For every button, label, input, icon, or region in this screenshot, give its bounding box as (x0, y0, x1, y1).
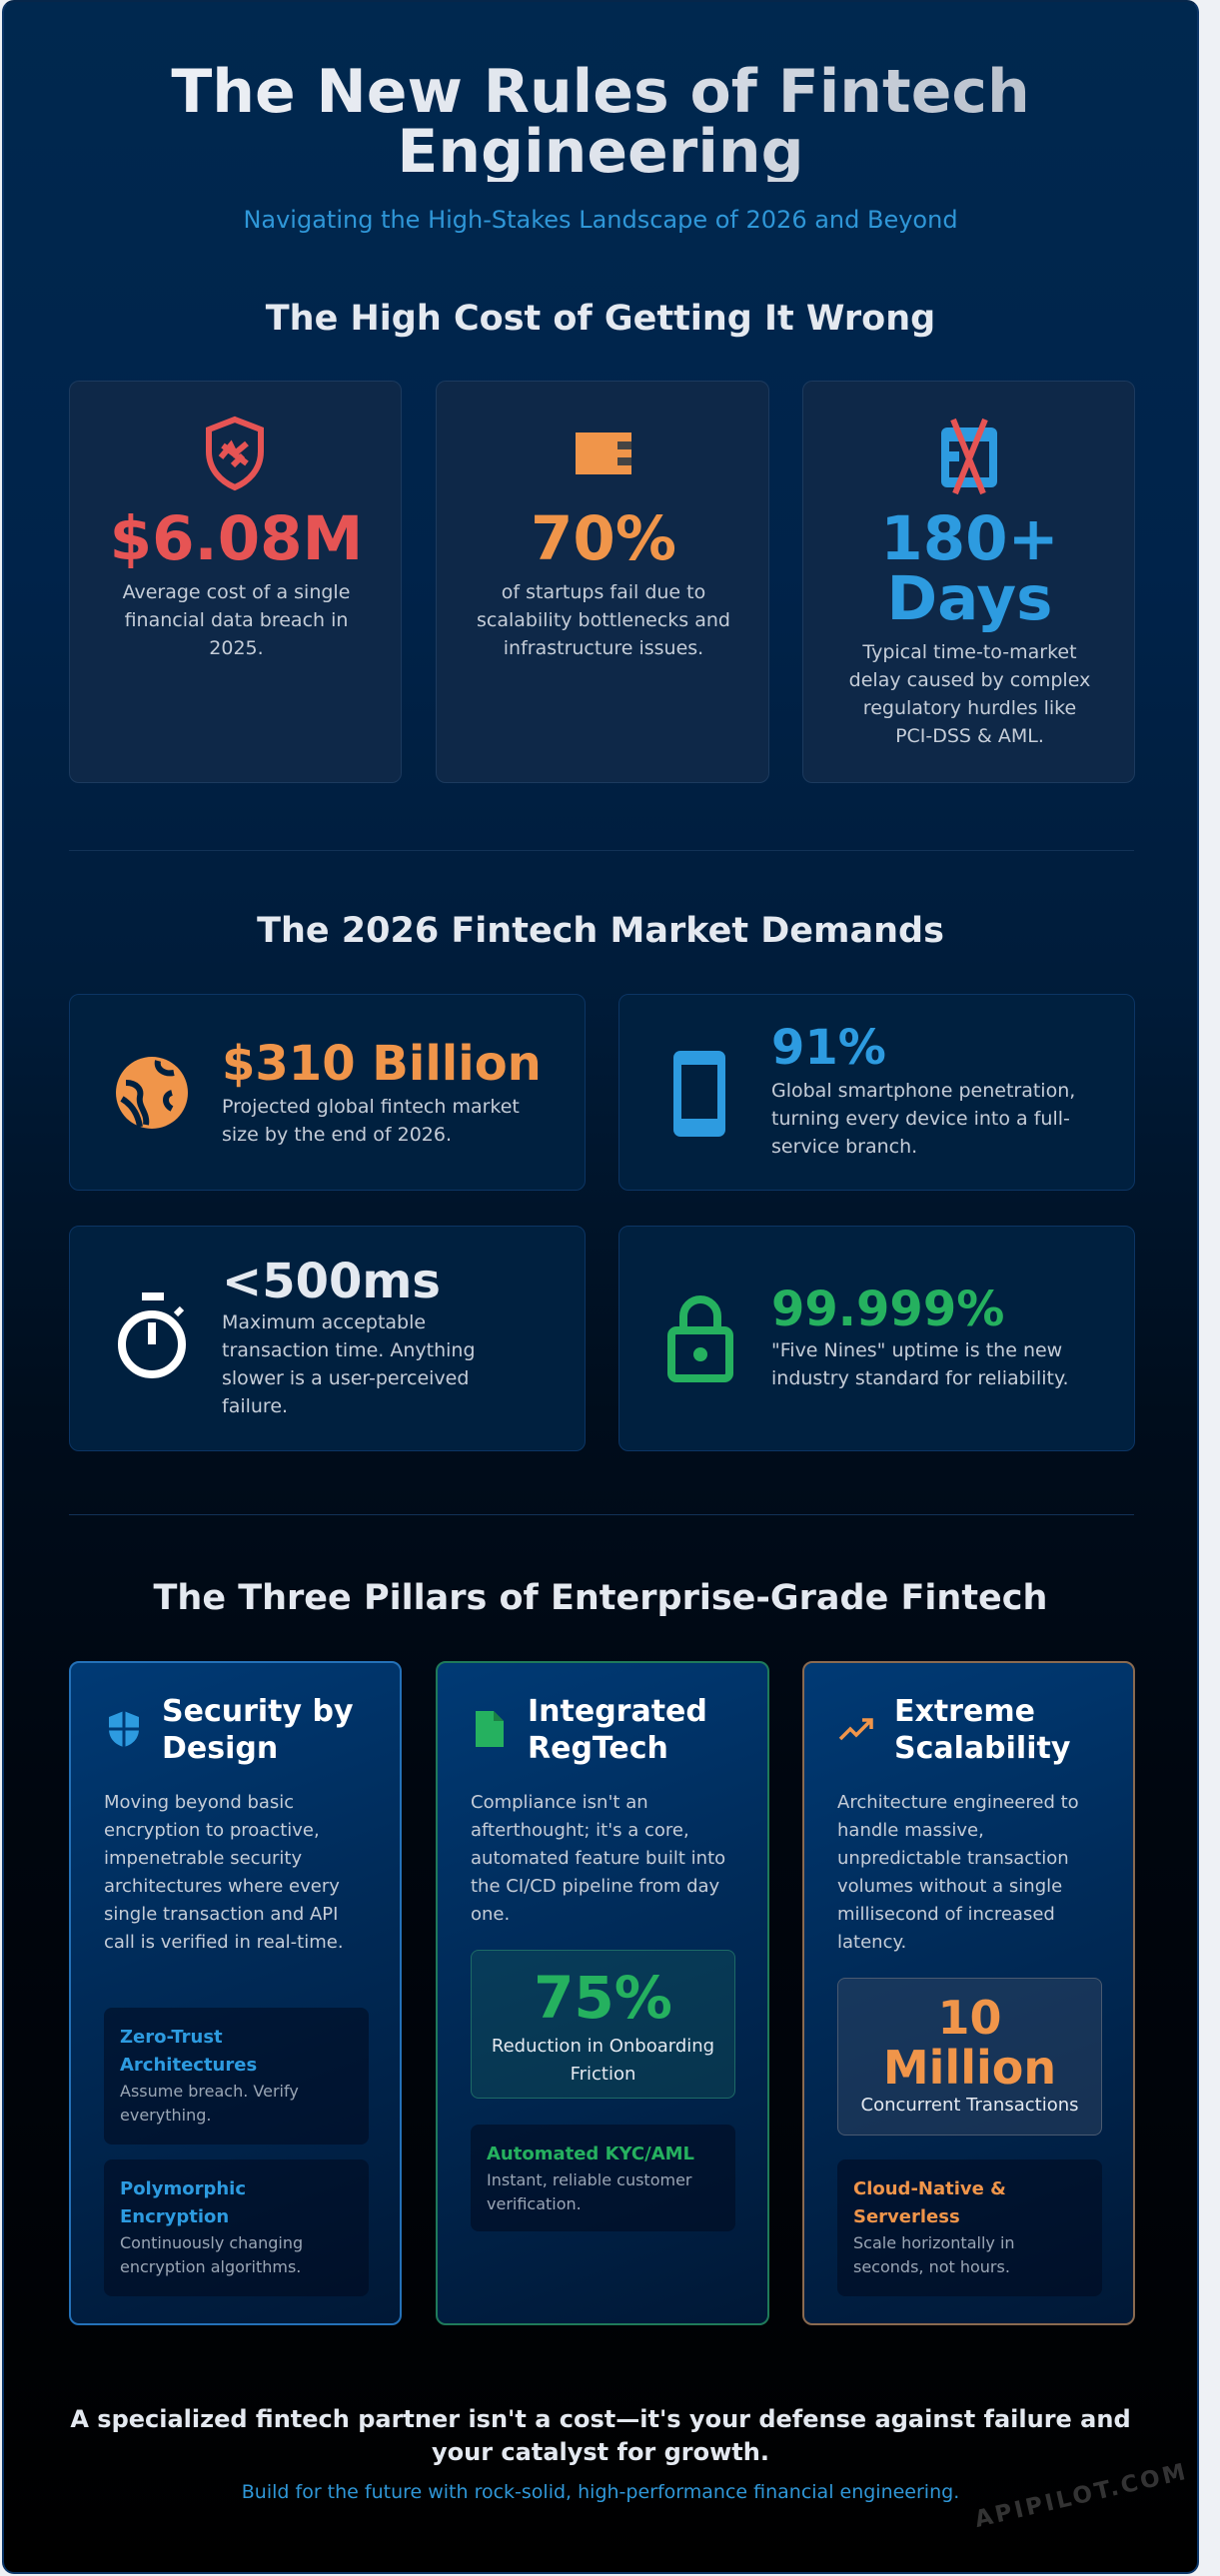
pillar title (528, 1694, 707, 1766)
card: uptime (618, 1226, 1135, 1451)
description: Typical time-to-market delay caused by complex regulatory hurdles like PCI-DSS & AML. (849, 641, 1090, 747)
sub: kyc: Automated KYC/AML (487, 2144, 694, 2164)
card: startup failure (436, 381, 769, 783)
stat box: 10 million: Million (883, 2041, 1056, 2095)
sub: cloud native (837, 2159, 1102, 2296)
sub: kyc (471, 2125, 735, 2231)
closing subline: Build for the future with rock-solid, high-performance financial engineering. (242, 2481, 959, 2503)
card: market size (69, 994, 586, 1191)
stat (880, 503, 1059, 634)
sub: polymorphic: Polymorphic Encryption (120, 2178, 246, 2227)
pillar: scalability (802, 1661, 1135, 2325)
pillar title: Scalability (894, 1731, 1070, 1766)
title: The New Rules of Fintech (171, 57, 1030, 127)
stat: Days (887, 563, 1053, 634)
closing statement: A specialized fintech partner isn't a cost—it's your defense against failure and your catalyst for growth. (70, 2405, 1131, 2466)
stat: 180+ (880, 503, 1059, 574)
description: Projected global fintech market size by the end of 2026. (222, 1096, 520, 1146)
sub: polymorphic: Continuously changing encryption algorithms. (120, 2233, 303, 2276)
sub: zero trust: Zero-Trust Architectures (120, 2027, 257, 2076)
pillar title (162, 1694, 354, 1766)
icon: shield (109, 1712, 139, 1747)
heading: market demands: The 2026 Fintech Market Demands (257, 911, 944, 951)
pillar: security (69, 1661, 402, 2325)
stat box: 10 million (837, 1978, 1102, 2136)
pillar title: Integrated (528, 1694, 707, 1729)
icon: document (476, 1711, 504, 1747)
pillar title: Design (162, 1731, 278, 1766)
pillar title: Extreme (894, 1694, 1035, 1729)
description: of startups fail due to scalability bottlenecks and infrastructure issues. (477, 581, 730, 659)
stat box: 10 million: 10 (937, 1991, 1001, 2045)
stat box: 75%: 75% (534, 1964, 672, 2032)
stat: $310 Billion (222, 1036, 542, 1092)
sub: polymorphic (104, 2159, 369, 2296)
sub: cloud native: Cloud-Native & Serverless (853, 2178, 1006, 2227)
pillar title (894, 1694, 1070, 1766)
stat: 99.999% (771, 1282, 1004, 1337)
card: breach cost (69, 381, 402, 783)
icon: phone (673, 1051, 725, 1137)
pillar description: Moving beyond basic encryption to proactive, impenetrable security architectures where every single transaction and API call is verified in real-time. (104, 1792, 344, 1953)
heading: three pillars: The Three Pillars of Enterprise-Grade Fintech (154, 1578, 1047, 1618)
card: smartphone (618, 994, 1135, 1191)
icon: trend arrow (839, 1718, 873, 1740)
pillar: regtech (436, 1661, 769, 2325)
description: "Five Nines" uptime is the new industry standard for reliability. (771, 1339, 1069, 1389)
description: Global smartphone penetration, turning every device into a full-service branch. (771, 1080, 1075, 1158)
description: Average cost of a single financial data breach in 2025. (123, 581, 350, 659)
heading: high cost: The High Cost of Getting It Wrong (266, 299, 935, 339)
title: Engineering (397, 117, 804, 187)
card: time to market (802, 381, 1135, 783)
title (4, 62, 1197, 182)
stat: 91% (771, 1020, 886, 1076)
pillar description: Architecture engineered to handle massive, unpredictable transaction volumes without a single millisecond of increased latency. (837, 1792, 1079, 1953)
stat: $6.08M (110, 503, 363, 574)
stat box: 10 million: Concurrent Transactions (861, 2095, 1079, 2116)
icon: shield (206, 416, 264, 491)
icon: block (576, 432, 631, 474)
pillar title: Security by (162, 1694, 354, 1729)
sub: zero trust: Assume breach. Verify everything. (120, 2082, 299, 2125)
stat: <500ms (222, 1254, 441, 1309)
stat box: 75%: Reduction in Onboarding Friction (492, 2036, 714, 2085)
icon: calendar crossed (941, 418, 997, 495)
stat: 70% (531, 503, 676, 574)
subtitle: Navigating the High-Stakes Landscape of 2026 and Beyond (243, 206, 958, 234)
sub: cloud native: Scale horizontally in seconds, not hours. (853, 2233, 1015, 2276)
sub: zero trust (104, 2008, 369, 2145)
watermark: APIPILOT.COM (972, 2459, 1191, 2533)
icon: globe (116, 1057, 188, 1129)
card: latency (69, 1226, 586, 1451)
sub: kyc: Instant, reliable customer verification. (487, 2170, 691, 2213)
description: Maximum acceptable transaction time. Anything slower is a user-perceived failure. (222, 1311, 476, 1417)
stat box: 75% (471, 1950, 735, 2099)
icon: stopwatch (118, 1292, 186, 1378)
pillar description: Compliance isn't an afterthought; it's a core, automated feature built into the CI/CD pipeline from day one. (471, 1792, 725, 1925)
pillar title: RegTech (528, 1731, 668, 1766)
icon: padlock (667, 1295, 733, 1382)
